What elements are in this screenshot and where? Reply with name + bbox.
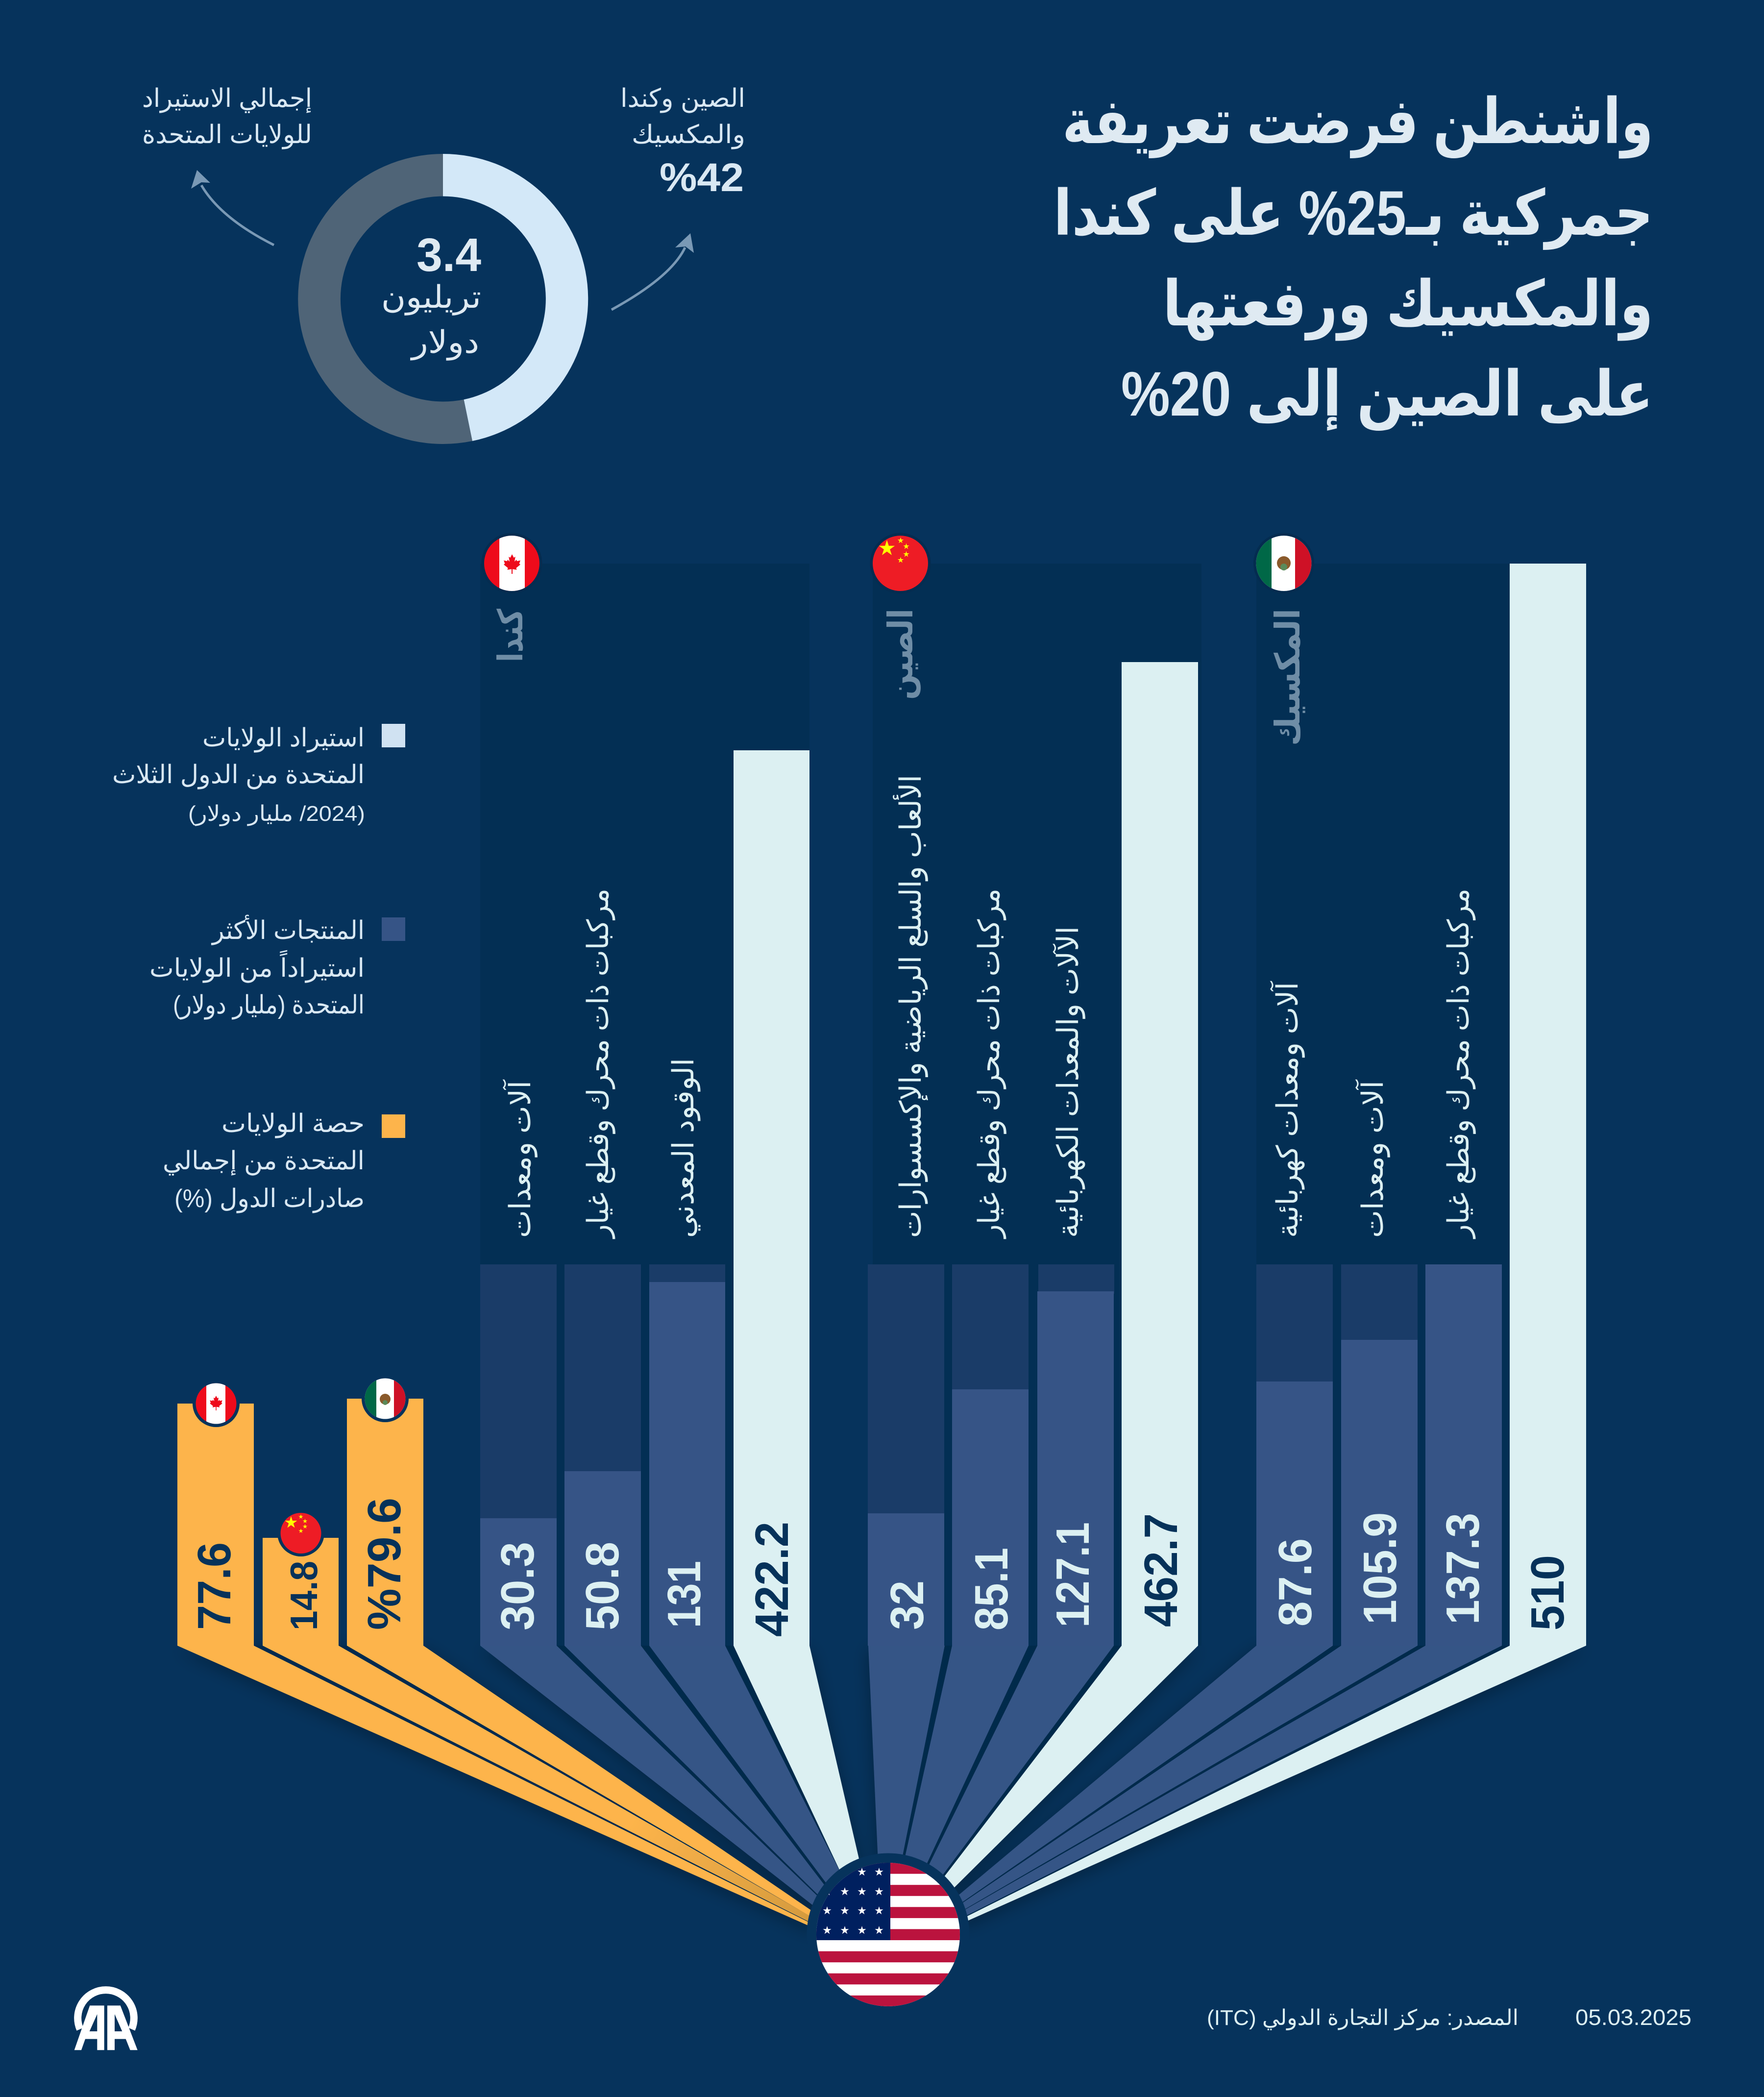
title: واشنطن فرضت تعريفة — [1062, 87, 1653, 159]
date: 05.03.2025 — [1575, 2005, 1691, 2030]
bar: Canada vehicles 50.8 — [564, 1264, 641, 1646]
bar: China total imports 462.7: 462.7 — [1135, 1513, 1187, 1627]
label: China, Canada and Mexico share — [620, 84, 745, 200]
bar: Canada vehicles 50.8: 50.8 — [576, 1542, 629, 1630]
source: المصدر: مركز التجارة الدولي (ITC) — [1207, 2006, 1519, 2030]
product label: machinery: آلات ومعدات — [1355, 1080, 1390, 1238]
icon: China flag small — [280, 1513, 321, 1554]
donut segment: rest of imports — [298, 154, 472, 444]
label: China, Canada and Mexico share: الصين وكندا — [620, 84, 745, 113]
legend item: most imported products: المنتجات الأكثر — [211, 914, 365, 945]
product label: machinery: آلات ومعدات — [502, 1080, 538, 1238]
product label: vehicles: مركبات ذات محرك وقطع غيار — [582, 888, 615, 1239]
legend item: US share of exports — [163, 1110, 405, 1213]
label: China, Canada and Mexico share: %42 — [660, 155, 744, 200]
bar: China share — [263, 1509, 339, 1646]
rays fan converging to the US flag — [177, 1646, 1586, 1929]
bar: Mexico total imports 510 — [1510, 564, 1586, 1646]
donut center value: دولار — [410, 324, 479, 361]
logo: Anadolu Agency — [74, 1990, 138, 2050]
bar: China toys 32: 32 — [881, 1580, 933, 1630]
legend item: US share of exports: صادرات الدول (%) — [174, 1184, 365, 1213]
panel: Canada — [480, 533, 809, 1646]
bar: Canada machinery 30.3 — [480, 1264, 557, 1646]
donut center value — [381, 229, 481, 361]
arrow: to share label — [612, 233, 694, 310]
product label: mineral fuels: الوقود المعدني — [667, 1058, 701, 1238]
title: جمركية بـ25% على كندا — [1054, 178, 1653, 250]
donut chart: US imports share — [298, 154, 588, 444]
label: China, Canada and Mexico share: والمكسيك — [632, 121, 745, 149]
bar: Mexico share — [347, 1375, 423, 1646]
legend item: imports from the three countries: (2024/ مليار دولار) — [188, 802, 365, 826]
bar: Canada total imports 422.2 — [734, 750, 809, 1646]
bar: China electrical machinery 127.1: 127.1 — [1047, 1522, 1099, 1628]
icon: Mexico flag — [1253, 533, 1314, 594]
panel: Mexico — [1253, 533, 1586, 1646]
bar: Canada mineral fuels 131: 131 — [658, 1561, 710, 1628]
bar: Canada total imports 422.2: 422.2 — [746, 1522, 798, 1637]
title: على الصين إلى 20% — [1121, 359, 1653, 431]
legend item: most imported products: استيراداً من الولايات — [149, 950, 365, 983]
legend item: most imported products — [149, 914, 405, 1020]
rays: Mexico — [952, 1646, 1586, 1924]
bar: Canada machinery 30.3: 30.3 — [491, 1542, 544, 1630]
country name: Mexico: المكسيك — [1269, 609, 1307, 746]
bar: Mexico electrical machinery 87.6: 87.6 — [1269, 1538, 1322, 1627]
icon: Mexico flag small — [365, 1378, 406, 1419]
rays: Canada — [480, 1646, 861, 1910]
bar: China vehicles 85.1: 85.1 — [965, 1548, 1018, 1630]
bar: China total imports 462.7 — [1122, 662, 1198, 1646]
bar: Mexico machinery 105.9 — [1341, 1264, 1418, 1646]
title — [1054, 87, 1653, 431]
label: total US imports — [142, 84, 312, 149]
ring around US flag — [807, 1853, 969, 2016]
legend item: imports from the three countries: استيراد الولايات — [202, 724, 365, 753]
legend — [112, 724, 405, 1213]
bar: China electrical machinery 127.1 — [1037, 1264, 1114, 1646]
label: total US imports: للولايات المتحدة — [142, 121, 312, 149]
bar: Mexico vehicles 137.3: 137.3 — [1437, 1513, 1489, 1625]
bar: Canada mineral fuels 131 — [649, 1264, 725, 1646]
icon: Canada flag small — [196, 1383, 237, 1424]
icon: Canada flag — [481, 533, 542, 594]
country name: Canada: كندا — [491, 609, 530, 662]
bar: China toys 32 — [868, 1264, 944, 1646]
title: والمكسيك ورفعتها — [1163, 269, 1653, 341]
legend item: US share of exports: المتحدة من إجمالي — [163, 1147, 365, 1176]
donut center value: 3.4 — [416, 229, 481, 281]
icon: US flag — [813, 1863, 963, 2007]
product label: vehicles: مركبات ذات محرك وقطع غيار — [973, 888, 1006, 1239]
legend item: imports from the three countries — [112, 724, 405, 826]
product label: electrical machinery: آلات ومعدات كهربائية — [1270, 981, 1305, 1238]
bar: Mexico electrical machinery 87.6 — [1256, 1264, 1333, 1646]
bar: China share: 14.8 — [282, 1561, 325, 1630]
country name: China: الصين — [882, 609, 921, 700]
legend item: US share of exports: حصة الولايات — [221, 1110, 365, 1138]
product label: toys and sports: الألعاب والسلع الرياضية والإكسسوارات — [893, 775, 928, 1238]
legend item: most imported products: المتحدة (مليار دولار) — [173, 991, 365, 1020]
bar: China vehicles 85.1 — [952, 1264, 1029, 1646]
bar: Canada share: 77.6 — [188, 1542, 241, 1630]
legend item: imports from the three countries: المتحدة من الدول الثلاث — [112, 761, 365, 789]
arrow: to total imports label — [191, 170, 274, 245]
label: total US imports: إجمالي الاستيراد — [142, 84, 312, 113]
rays: China — [868, 1646, 1198, 1893]
donut segment: China, Canada and Mexico — [443, 154, 588, 441]
bar: Mexico machinery 105.9: 105.9 — [1354, 1512, 1406, 1625]
bar: Mexico share: %79.6 — [358, 1498, 411, 1630]
bar: Mexico vehicles 137.3 — [1425, 1264, 1502, 1646]
product label: electrical machinery: الآلات والمعدات الكهربائية — [1052, 926, 1085, 1238]
rays: orange share of exports — [177, 1646, 818, 1929]
bar: Mexico total imports 510: 510 — [1521, 1555, 1574, 1630]
icon: China flag — [870, 533, 931, 594]
product label: vehicles: مركبات ذات محرك وقطع غيار — [1442, 888, 1476, 1239]
panel: China — [868, 533, 1201, 1646]
donut center value: تريليون — [381, 279, 481, 316]
panel: orange bars — [177, 1375, 423, 1646]
bar: Canada share — [177, 1380, 254, 1646]
